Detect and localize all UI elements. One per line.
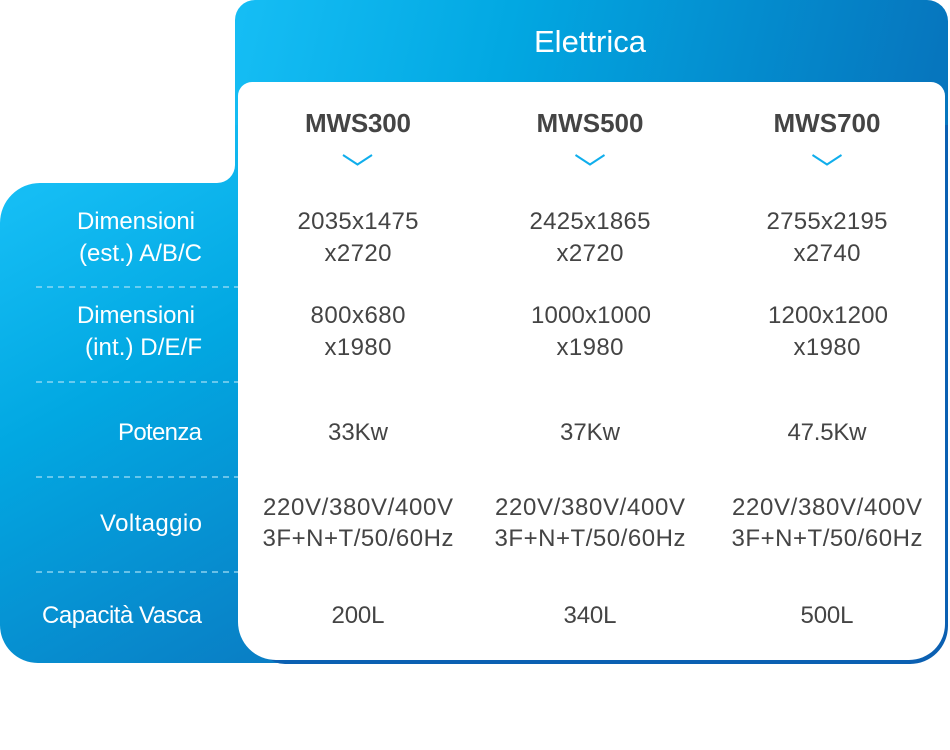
text block: row labels [42, 208, 203, 629]
column: MWS300: 3F+N+T/50/60Hz [262, 525, 454, 552]
column: MWS300: x2720 [324, 240, 392, 267]
column: MWS300: 200L [332, 602, 384, 629]
icon: chevron down [576, 155, 604, 164]
column: MWS300: 2035x1475 [298, 208, 418, 235]
panel: right and bottom card border [260, 60, 948, 664]
row separators [36, 287, 238, 572]
column heading: MWS300 [305, 108, 411, 138]
label: Dimensioni est: Dimensioni [77, 208, 195, 235]
column: MWS700: x1980 [794, 334, 860, 361]
column: MWS300: 220V/380V/400V [263, 494, 453, 521]
column: MWS500: 1000x1000 [531, 302, 651, 329]
column: MWS300 [262, 108, 454, 629]
column: MWS700: 2755x2195 [766, 208, 888, 235]
icon: chevron down [343, 155, 372, 164]
label: Dimensioni est: (est.) A/B/C [79, 240, 202, 267]
column: MWS700: 3F+N+T/50/60Hz [732, 525, 922, 552]
column: MWS500: 37Kw [560, 419, 621, 446]
column: MWS500: 220V/380V/400V [495, 494, 685, 521]
label: Potenza: Potenza [118, 419, 203, 446]
column: MWS300: 800x680 [310, 302, 406, 329]
column: MWS700: 47.5Kw [788, 419, 867, 446]
column: MWS500 [494, 108, 686, 629]
column: MWS300: x1980 [324, 334, 392, 361]
label: Dimensioni int: Dimensioni [77, 302, 195, 329]
panel: header band [235, 0, 948, 125]
label: Capacità Vasca: Capacità Vasca [42, 602, 203, 629]
column: MWS500: 2425x1865 [530, 208, 650, 235]
column: MWS700: x2740 [794, 240, 860, 267]
column: MWS300: 33Kw [328, 419, 389, 446]
column: MWS500: 340L [564, 602, 616, 629]
column: MWS500: x2720 [556, 240, 624, 267]
column: MWS700: 220V/380V/400V [732, 494, 922, 521]
column: MWS700 [732, 108, 922, 629]
label: Dimensioni int [77, 302, 202, 361]
column: MWS500: 3F+N+T/50/60Hz [494, 525, 686, 552]
column: MWS700: 1200x1200 [768, 302, 888, 329]
panel: white data card [238, 82, 945, 660]
panel: row labels background [0, 100, 300, 663]
heading: Elettrica: Elettrica [534, 24, 647, 59]
label: Voltaggio: Voltaggio [100, 510, 202, 537]
column: MWS700: 500L [800, 602, 854, 629]
label: Dimensioni int: (int.) D/E/F [85, 334, 202, 361]
column: MWS500: x1980 [556, 334, 624, 361]
icon: chevron down [812, 155, 842, 164]
column heading: MWS500 [536, 108, 644, 138]
label: Dimensioni est [77, 208, 202, 267]
column heading: MWS700 [774, 108, 880, 138]
